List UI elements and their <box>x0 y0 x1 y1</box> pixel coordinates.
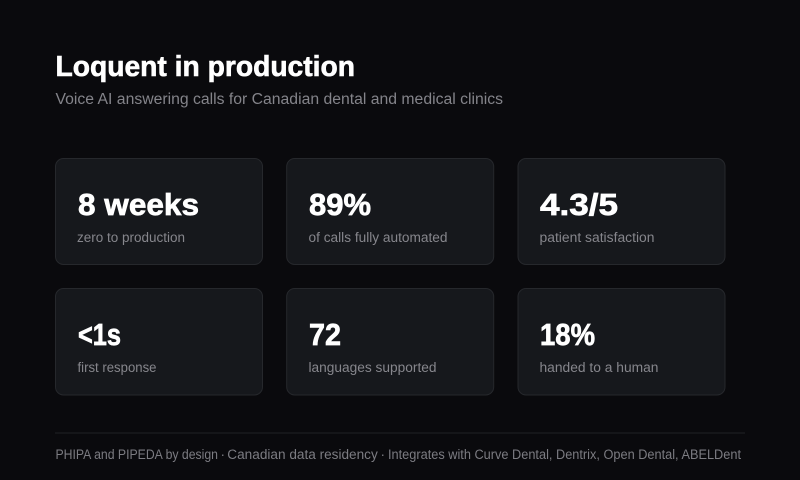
panel: 72: 72 <box>309 317 341 352</box>
footer text: · <box>380 447 385 462</box>
panel: 8 weeks: 8 weeks <box>78 187 199 222</box>
panel: 72: languages supported <box>308 360 436 375</box>
panel: 4.3/5: patient satisfaction <box>540 230 654 245</box>
footer text: Integrates with Curve Dental, Dentrix, Open Dental, ABELDent <box>388 447 741 462</box>
panel: under 1s: <1s <box>78 317 121 352</box>
panel: 4.3/5: 4.3/5 <box>540 187 618 222</box>
panel: 89%: of calls fully automated <box>308 230 448 245</box>
panel: 72 <box>287 288 494 395</box>
panel: under 1s <box>56 288 262 395</box>
panel: 18% <box>518 288 725 395</box>
footer text: Canadian data residency <box>227 447 378 462</box>
panel: 4.3/5 <box>518 158 725 264</box>
subtitle: Voice AI answering calls for Canadian dental and medical clinics <box>56 91 503 108</box>
footer text: · <box>220 447 225 462</box>
footer text <box>56 447 741 462</box>
panel: 18%: 18% <box>540 317 595 352</box>
panel: under 1s: first response <box>78 360 156 375</box>
panel: 18%: handed to a human <box>540 360 658 375</box>
panel: 8 weeks <box>56 158 262 264</box>
panel: 89%: 89% <box>309 187 371 222</box>
footer text: PHIPA and PIPEDA by design <box>56 447 218 462</box>
title: Loquent in production <box>56 51 355 83</box>
panel: 8 weeks: zero to production <box>77 230 185 245</box>
panel: 89% <box>287 158 494 264</box>
